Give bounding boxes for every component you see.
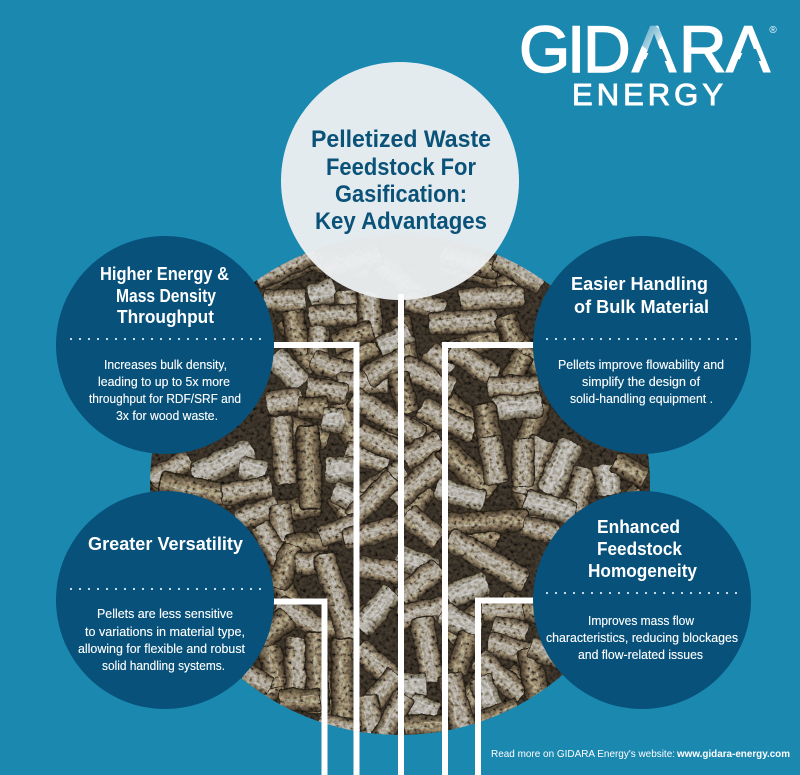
pellet photograph disc: [150, 254, 650, 735]
body text: leading to up to 5x more: [98, 375, 230, 389]
footer: website link: [491, 748, 790, 760]
body text: Pellets are less sensitive: [97, 607, 233, 621]
panel: higher energy and mass density throughput: [56, 236, 274, 454]
heading: [100, 264, 229, 327]
body text: [558, 358, 724, 406]
body text: [89, 358, 241, 423]
body text: characteristics, reducing blockages: [546, 631, 738, 645]
body text: and flow-related issues: [578, 648, 703, 662]
heading: [571, 274, 709, 317]
title: Gasification:: [335, 181, 467, 208]
body text: allowing for flexible and robust: [78, 642, 246, 656]
title: Pelletized Waste: [311, 126, 491, 153]
heading: Easier Handling: [571, 274, 708, 294]
body text: throughput for RDF/SRF and: [89, 392, 241, 406]
body text: Pellets improve flowability and: [558, 358, 724, 372]
title: [311, 126, 491, 235]
panel: greater versatility: [56, 491, 274, 709]
heading: Mass Density: [116, 286, 216, 306]
title: Key Advantages: [315, 208, 487, 235]
body text: to variations in material type,: [85, 625, 245, 639]
body text: Improves mass flow: [588, 614, 695, 628]
heading: of Bulk Material: [574, 297, 709, 317]
body text: 3x for wood waste.: [116, 409, 218, 423]
logo: Gidara Energy: GIDARA: [519, 12, 770, 86]
footer: website link: Read more on GIDARA Energy's website:: [491, 748, 675, 760]
body text: [546, 614, 738, 662]
panel: enhanced feedstock homogeneity: [533, 491, 751, 709]
logo: Gidara Energy: ®: [769, 25, 777, 36]
heading: Feedstock: [597, 539, 683, 559]
body text: solid-handling equipment .: [570, 392, 713, 406]
title: Feedstock For: [326, 154, 476, 181]
body text: [78, 607, 246, 673]
heading: Higher Energy &: [100, 264, 229, 284]
panel: title circle: [281, 62, 519, 300]
heading: Greater Versatility: [88, 534, 243, 554]
heading: Throughput: [117, 307, 214, 327]
heading: [588, 517, 697, 581]
logo: Gidara Energy: ENERGY: [572, 77, 723, 112]
body text: Increases bulk density,: [104, 358, 227, 372]
heading: Enhanced: [597, 517, 680, 537]
body text: simplify the design of: [582, 375, 701, 389]
connector lines: [270, 294, 536, 775]
heading: Homogeneity: [588, 561, 697, 581]
panel: easier handling of bulk material: [533, 236, 751, 454]
body text: solid handling systems.: [102, 659, 225, 673]
footer: website link: www.gidara-energy.com: [676, 748, 790, 760]
